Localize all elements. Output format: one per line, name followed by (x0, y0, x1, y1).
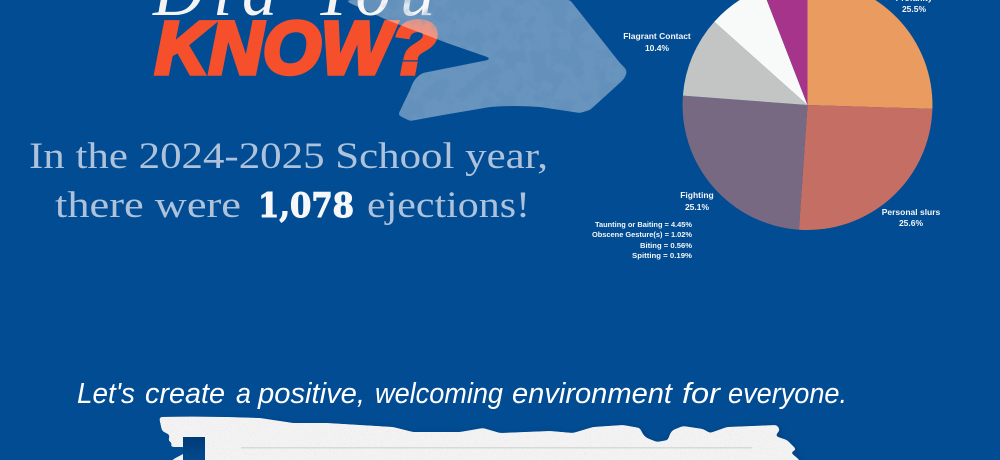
heading: positive environment message: a (236, 378, 251, 410)
label: personal slurs (882, 207, 941, 228)
text block: ejection statistic: In the 2024-2025 School year, (29, 136, 548, 177)
slice: profanity (808, 0, 932, 109)
heading: positive environment message: welcoming (375, 378, 503, 410)
icon: torn paper arrow pointing to pie chart (343, 0, 627, 121)
slice: white segment (714, 0, 808, 105)
label: fighting (680, 190, 714, 212)
divider line (241, 447, 752, 448)
text block: ejection statistic: 1,078 (258, 186, 354, 226)
list: minor ejection reasons: Spitting = 0.19% (632, 251, 692, 260)
label: flagrant contact (623, 31, 691, 53)
heading: positive environment message: everyone. (728, 378, 847, 410)
list: minor ejection reasons: Biting = 0.56% (640, 241, 692, 250)
label: fighting: Fighting (680, 190, 714, 200)
title: KNOW?: KNOW? (155, 6, 437, 90)
text block: ejection statistic: ejections! (367, 185, 530, 226)
label: profanity (896, 0, 933, 14)
heading: positive environment message: create (145, 378, 225, 410)
torn paper panel (159, 417, 806, 460)
heading: positive environment message: environment (512, 378, 674, 410)
slice: fighting (683, 96, 808, 230)
list: minor ejection reasons: Obscene Gesture(s) = 1.02% (592, 230, 692, 239)
heading: positive environment message (77, 378, 847, 410)
heading: positive environment message: for (682, 378, 722, 410)
slice: flagrant contact (683, 22, 808, 105)
heading: positive environment message: positive, (257, 378, 365, 410)
text block: ejection statistic: there were (55, 185, 241, 226)
slice: personal slurs (799, 105, 932, 230)
text block: ejection statistic (29, 136, 548, 226)
list: minor ejection reasons (592, 220, 692, 260)
label: flagrant contact: Flagrant Contact (623, 31, 691, 41)
list: minor ejection reasons: Taunting or Baiting = 4.45% (595, 220, 692, 229)
label: personal slurs: 25.6% (899, 218, 923, 228)
slice: magenta segment (762, 0, 808, 105)
label: flagrant contact: 10.4% (645, 43, 669, 53)
label: personal slurs: Personal slurs (882, 207, 941, 217)
label: fighting: 25.1% (685, 202, 709, 212)
pie chart: ejection reasons (683, 0, 932, 230)
icon: dark square marker (183, 437, 205, 460)
heading: positive environment message: Let's (77, 378, 135, 410)
label: profanity: 25.5% (902, 4, 926, 14)
